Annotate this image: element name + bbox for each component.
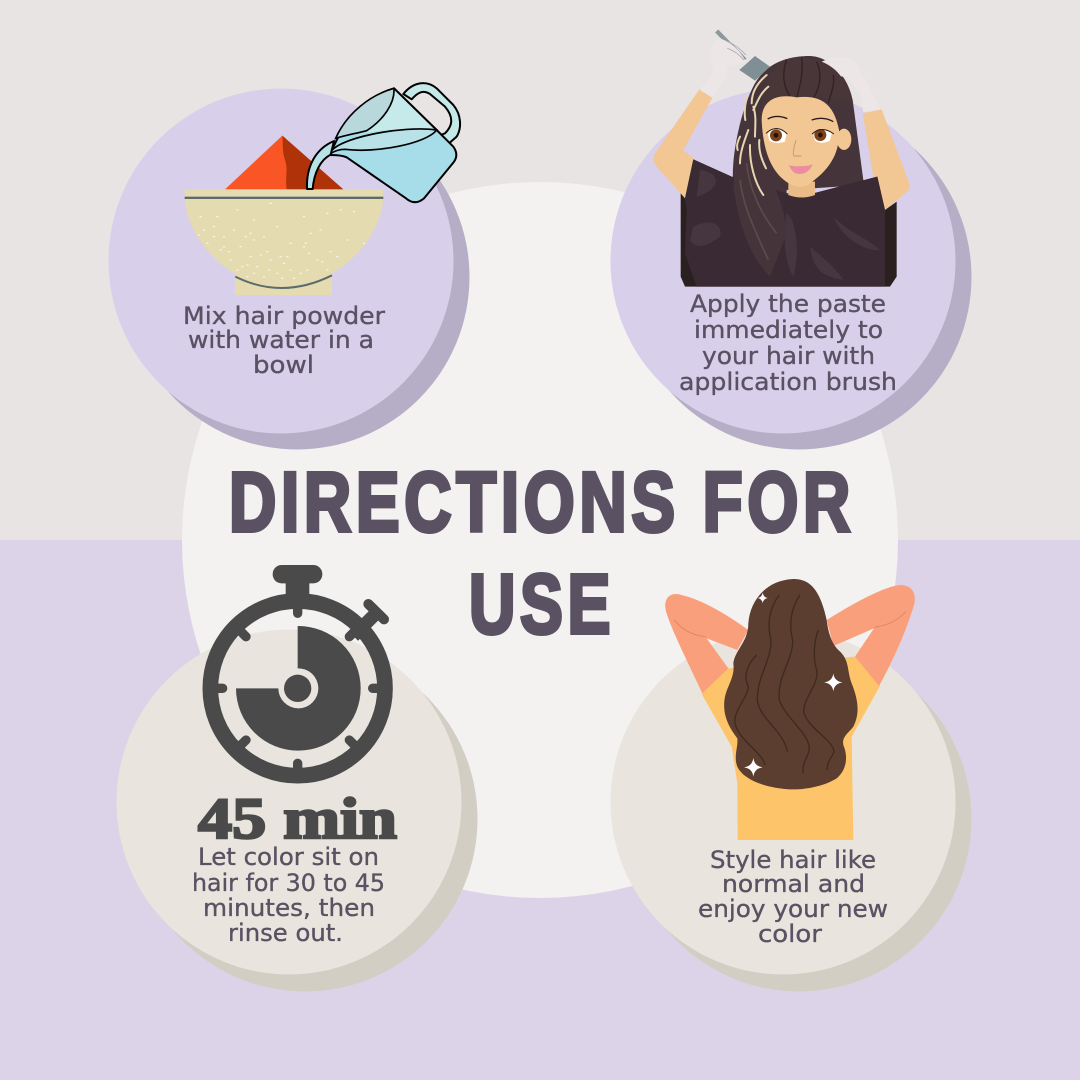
panel: step 2 apply — [610, 31, 972, 450]
panel: step 4 style — [610, 579, 972, 992]
text: step 4 caption — [698, 846, 888, 948]
text: step 1 caption: bowl — [253, 351, 314, 379]
icon: powder pile, bowl and water jug — [185, 83, 460, 295]
text: step 3 caption: Let color sit on — [198, 843, 379, 871]
text: step 2 caption: your hair with — [702, 342, 875, 370]
text: step 4 caption: enjoy your new — [698, 895, 888, 923]
text: step 2 caption: application brush — [679, 368, 897, 396]
title: USE — [469, 557, 615, 651]
text: step 1 caption: with water in a — [188, 326, 374, 354]
title — [229, 455, 855, 651]
text: step 3 caption: rinse out. — [228, 919, 343, 947]
text: step 2 caption: immediately to — [694, 316, 883, 344]
text: step 4 caption: normal and — [722, 870, 865, 898]
text: 45 min: 45 min — [198, 786, 397, 851]
icon: stopwatch — [210, 565, 385, 776]
text: step 3 caption: minutes, then — [203, 894, 375, 922]
text: step 2 caption — [679, 290, 897, 396]
text: step 4 caption: Style hair like — [710, 846, 876, 874]
icon: woman applying paste to hair — [653, 31, 910, 287]
icon: woman with styled hair from behind — [665, 579, 915, 840]
text: step 3 caption: hair for 30 to 45 — [192, 869, 385, 897]
text: step 4 caption: color — [758, 920, 822, 948]
text: step 1 caption — [183, 302, 385, 379]
text: step 3 caption — [192, 843, 385, 947]
text: step 2 caption: Apply the paste — [690, 290, 886, 318]
panel: step 3 wait — [116, 565, 478, 992]
title: DIRECTIONS FOR — [229, 455, 855, 549]
text: step 1 caption: Mix hair powder — [183, 302, 385, 330]
panel: step 1 mix — [108, 83, 470, 450]
